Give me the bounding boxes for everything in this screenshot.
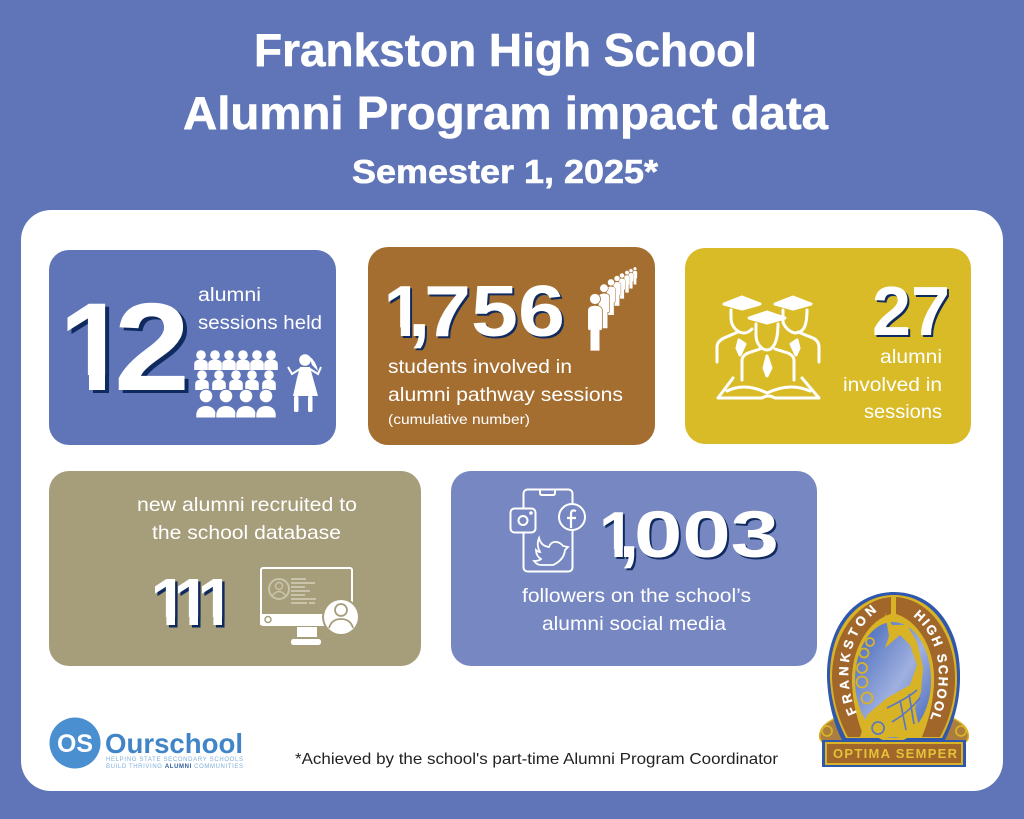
number: 1,756: , <box>410 266 432 355</box>
text: alumni involved in sessions: alumni <box>880 346 942 368</box>
logo: school crest <box>818 592 970 767</box>
number: 12: 1 <box>59 278 128 417</box>
text: new alumni recruited <box>137 494 357 544</box>
text: alumni sessions held <box>198 285 322 334</box>
number: 111: 1 <box>153 567 190 642</box>
icon: audience <box>194 350 278 418</box>
icon: phone with social logos <box>510 490 585 572</box>
icon: presenter <box>288 354 321 412</box>
text: students involved: alumni pathway sessions <box>388 384 623 406</box>
number: 111: 1 <box>197 565 234 640</box>
number: 111: 1 <box>150 565 187 640</box>
number: 12: 2 <box>114 278 190 417</box>
number: 1,003: 1 <box>601 500 637 573</box>
title: Alumni Program impact data <box>183 87 828 139</box>
text: alumni involved in sessions <box>843 346 942 423</box>
number: 27: 27 <box>872 272 950 350</box>
number: 12 <box>68 302 188 393</box>
text: students involved: (cumulative number) <box>388 411 530 427</box>
number: 1,003 <box>603 510 778 570</box>
panel: students involved <box>368 247 655 445</box>
logo: Ourschool: BUILD THRIVING ALUMNI COMMUNITIES <box>106 764 243 770</box>
text: new alumni recruited: the school database <box>152 522 341 544</box>
crest: motto banner <box>822 740 966 767</box>
number: 1,756: 756 <box>426 274 567 354</box>
number: 27: 27 <box>874 274 952 352</box>
text: followers: alumni social media <box>542 613 726 635</box>
logo: school crest: OPTIMA SEMPER <box>833 746 958 761</box>
number: 1,756: , <box>408 264 430 353</box>
title: Semester 1, 2025* <box>352 153 658 190</box>
number: 1,756: 1 <box>383 272 423 352</box>
logo: Ourschool: OS <box>57 730 93 758</box>
footnote: *Achieved by the school's part-time Alumni Program Coordinator <box>295 751 779 768</box>
panel: alumni involved <box>685 248 971 444</box>
text: followers <box>522 585 751 635</box>
text: alumni sessions held: sessions held <box>198 313 322 334</box>
title: Frankston High School <box>254 24 757 76</box>
text: students involved: students involved in <box>388 356 572 378</box>
logo: Ourschool <box>50 718 243 770</box>
text: alumni involved in sessions: sessions <box>864 401 942 423</box>
number: 1,003: , <box>619 493 639 573</box>
text: students involved <box>388 356 623 427</box>
crest: arch lettering: FRANKSTON <box>839 604 876 716</box>
icon: computer with profile <box>260 568 360 645</box>
panel: white card <box>21 210 1003 791</box>
crest: arch lettering <box>839 604 948 720</box>
number: 1,003: 003 <box>634 497 779 571</box>
number: 1,756: 756 <box>424 272 565 352</box>
text: alumni involved in sessions: involved in <box>843 374 942 396</box>
number: 111: 1 <box>200 567 237 642</box>
icon: line of students <box>588 267 637 351</box>
number: 12: 2 <box>118 281 194 420</box>
number: 1,003: 1 <box>599 498 635 571</box>
icon: graduates and book <box>717 297 819 398</box>
logo: Ourschool: HELPING STATE SECONDARY SCHOOLS <box>106 757 243 763</box>
crest: arch lettering: HIGH SCHOOL <box>914 610 948 720</box>
number: 111 <box>155 579 225 628</box>
crest: seahorse <box>856 613 923 737</box>
number: 1,003: , <box>621 495 641 575</box>
number: 111: 1 <box>176 567 213 642</box>
number: 12: 1 <box>63 281 132 420</box>
logo: Ourschool: Ourschool <box>105 728 243 759</box>
text: new alumni recruited: new alumni recruited to <box>137 494 357 516</box>
panel: social media followers <box>451 471 817 666</box>
number: 1,003: 003 <box>636 499 781 573</box>
number: 1,756: 1 <box>385 274 425 354</box>
number: 111: 1 <box>173 565 210 640</box>
panel: new alumni recruited <box>49 471 421 666</box>
title <box>183 24 828 190</box>
panel: alumni sessions held <box>49 250 336 445</box>
text: followers: followers on the school’s <box>522 585 751 607</box>
text: alumni sessions held: alumni <box>198 285 261 306</box>
number: 1,756 <box>388 285 564 350</box>
crest: scrolls <box>820 712 856 745</box>
